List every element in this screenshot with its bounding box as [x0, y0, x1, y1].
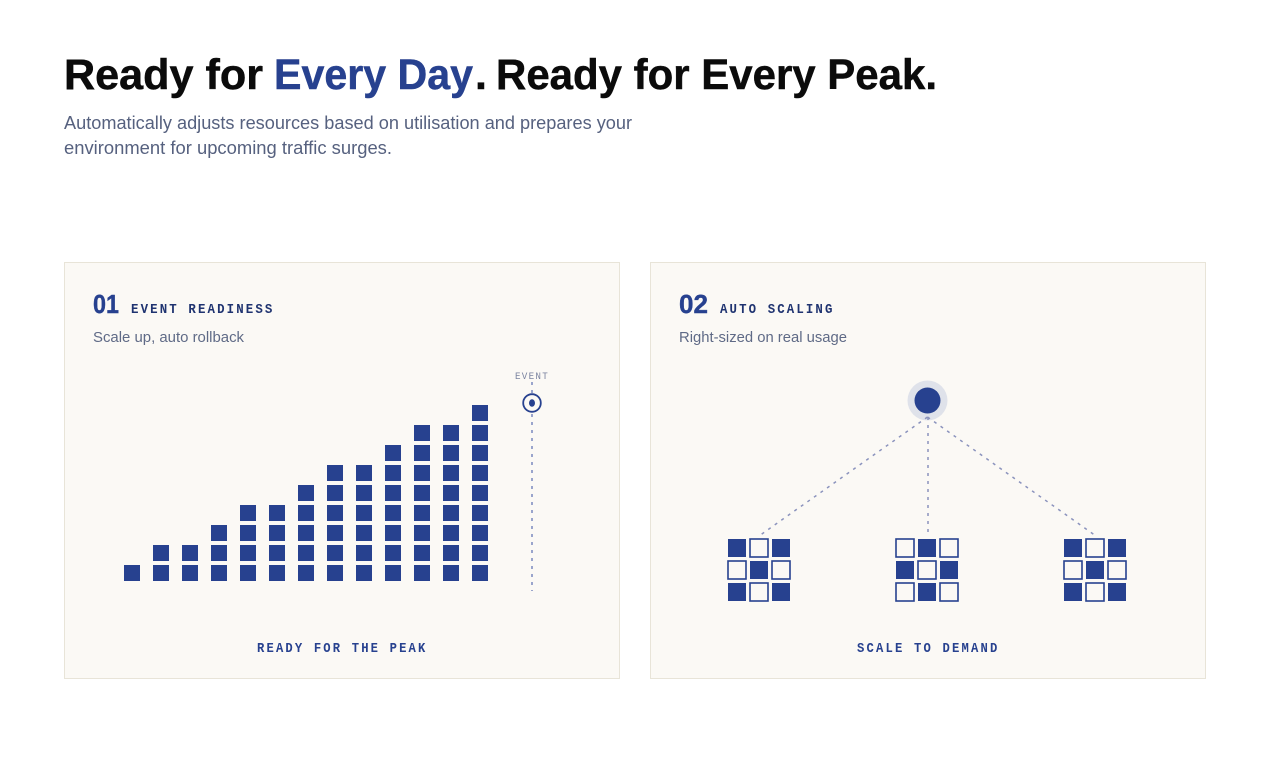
- panel description: Right-sized on real usage: [679, 329, 847, 346]
- title: Every Day: [274, 51, 473, 99]
- server grid right: [1064, 539, 1126, 601]
- title: Ready for Every Peak.: [496, 51, 937, 99]
- icon: event target: [523, 394, 541, 412]
- icon: hub node: [908, 380, 948, 420]
- subtitle text: [64, 113, 632, 158]
- subtitle text: environment for upcoming traffic surges.: [64, 138, 392, 158]
- panel heading: AUTO SCALING: [720, 302, 834, 318]
- panel caption: SCALE TO DEMAND: [857, 642, 1000, 657]
- title: .: [475, 51, 487, 99]
- title: [64, 51, 937, 99]
- panel: event readiness: [64, 262, 620, 678]
- event label: EVENT: [515, 371, 549, 383]
- panel number 02: 02: [679, 289, 708, 319]
- panel description: Scale up, auto rollback: [93, 329, 244, 346]
- panel caption: READY FOR THE PEAK: [257, 642, 428, 657]
- title: Ready for: [64, 51, 263, 99]
- panel: auto scaling: [650, 262, 1206, 678]
- panel number 01: 01: [93, 289, 119, 319]
- server grid centre: [896, 539, 958, 601]
- subtitle text: Automatically adjusts resources based on utilisation and prepares your: [64, 113, 632, 133]
- server grid left: [728, 539, 790, 601]
- panel heading: EVENT READINESS: [131, 302, 274, 318]
- stacked square growth chart: [124, 405, 488, 581]
- connector lines: [759, 417, 1096, 536]
- event marker line: [531, 382, 533, 591]
